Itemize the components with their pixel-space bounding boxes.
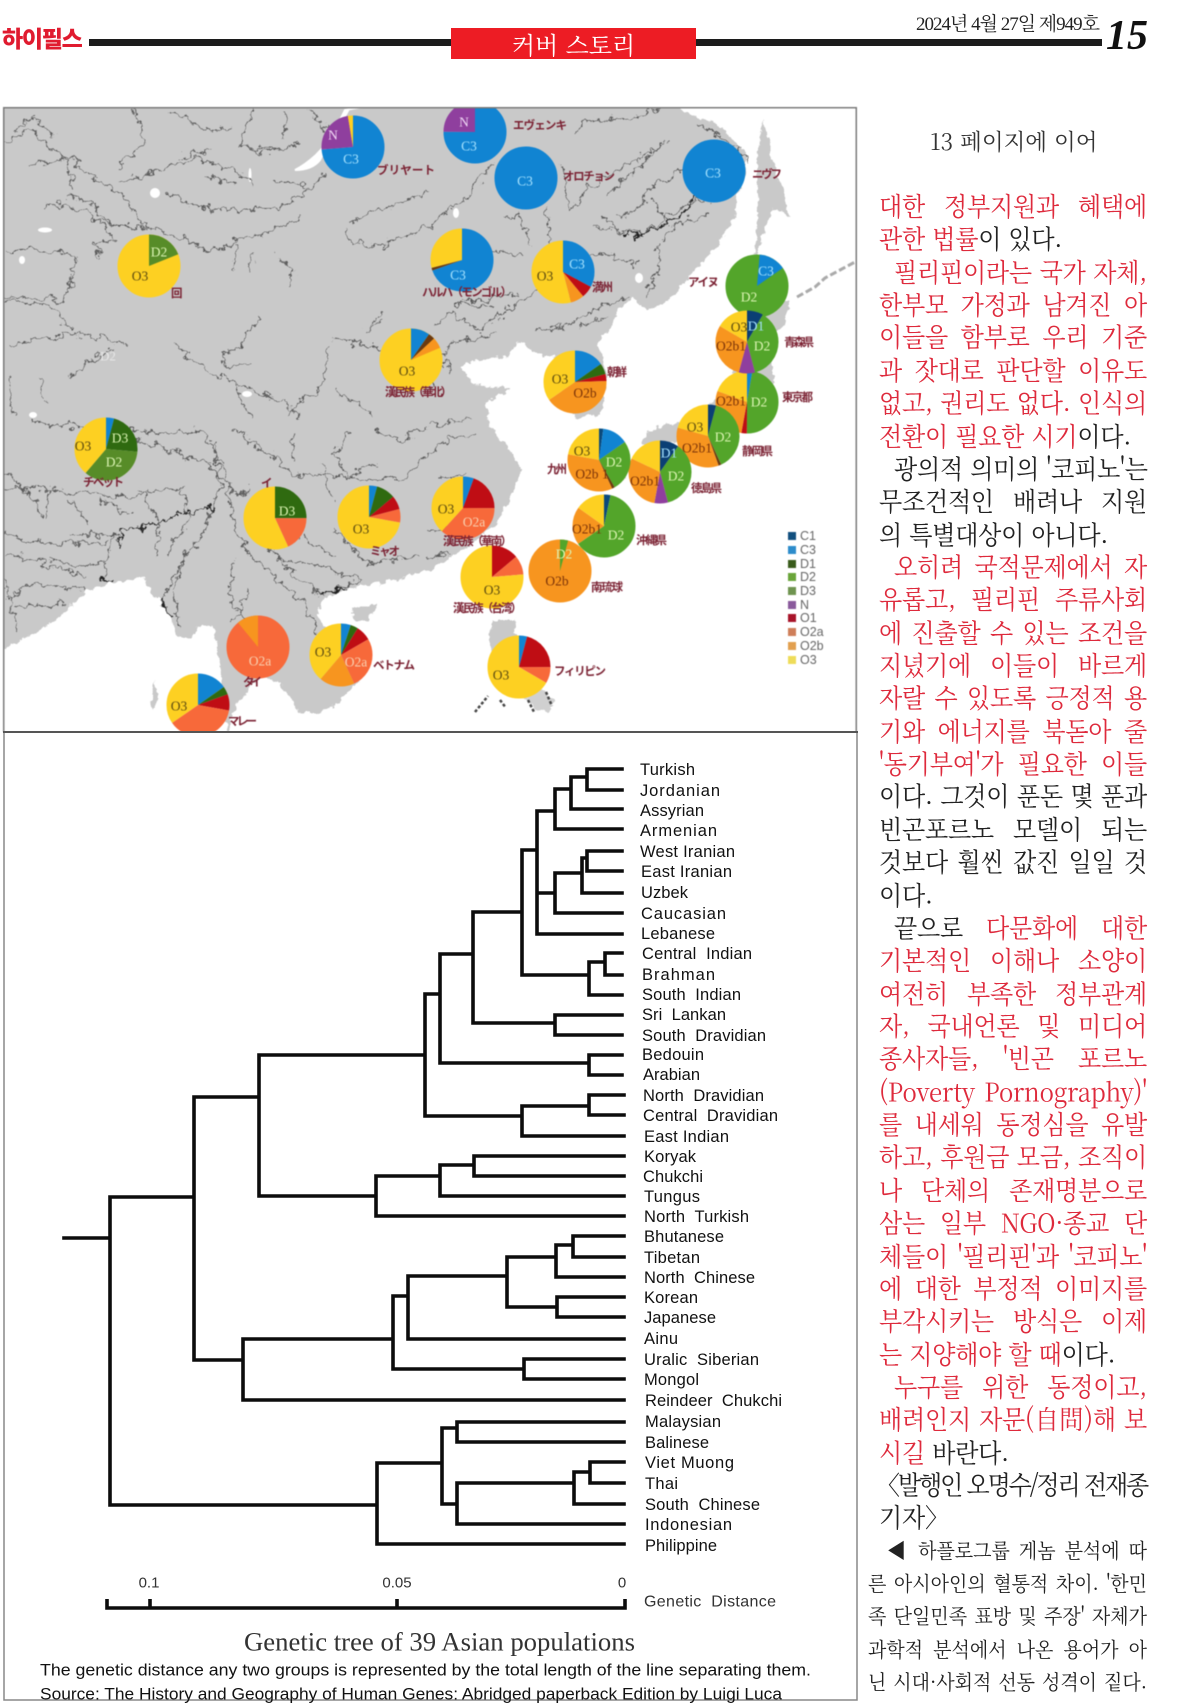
article body column: 한부모 가정과 남겨진 아 xyxy=(879,284,1147,322)
article body column: 종사자들, '빈곤 포르노 xyxy=(879,1038,1147,1076)
article body column: 것보다 훨씬 값진 일일 것 xyxy=(879,842,1147,879)
population labels: Central Indian xyxy=(642,945,752,963)
article body column: 과 잣대로 판단할 이유도 xyxy=(879,350,1147,388)
pie: Evenki xyxy=(459,114,491,154)
map place labels in Japanese: タイ xyxy=(243,676,262,689)
continuation note: 13 페이지에 이어 xyxy=(930,125,1098,157)
map place labels in Japanese: チベット xyxy=(83,476,124,489)
population labels: Mongol xyxy=(644,1371,699,1389)
article body column: 기자〉 xyxy=(879,1497,949,1535)
legend: haplogroups: C3 xyxy=(800,543,816,557)
pie: Han South: O2a xyxy=(463,514,485,530)
map place labels in Japanese: エヴェンキ xyxy=(513,118,567,132)
population labels: North Dravidian xyxy=(643,1087,764,1105)
photo caption: 족 단일민족 표방 및 주장' 자체가 xyxy=(868,1601,1147,1630)
pie: Thai: O2a xyxy=(249,654,271,668)
photo caption: 닌 시대·사회적 선동 성격이 짙다. xyxy=(868,1667,1147,1696)
population labels: Reindeer Chukchi xyxy=(645,1392,782,1410)
legend: haplogroups: O3 xyxy=(800,653,817,667)
genetic distance scale: 0.05 xyxy=(382,1574,412,1592)
legend: haplogroups: O2a xyxy=(800,625,824,639)
genetic distance scale xyxy=(107,1574,776,1610)
map place labels in Japanese: 青森県 xyxy=(784,335,814,349)
article body column: (Poverty Pornography)' xyxy=(879,1071,1147,1109)
population labels: Central Dravidian xyxy=(643,1107,778,1125)
map place labels in Japanese: 南琉球 xyxy=(591,580,624,594)
article body column: 오히려 국적문제에서 자 xyxy=(894,546,1147,584)
pie: Han North: O3 xyxy=(399,364,415,378)
pie: Shizuoka xyxy=(682,420,731,456)
pie: Kyushu: D2 xyxy=(606,454,622,470)
population labels: Balinese xyxy=(645,1434,709,1452)
population labels: Brahman xyxy=(642,966,715,984)
population labels: Lebanese xyxy=(641,925,715,943)
pie: Korea xyxy=(552,366,597,400)
pie: Kyushu xyxy=(574,444,622,482)
population labels: South Chinese xyxy=(645,1496,760,1514)
map place labels in Japanese: アイヌ xyxy=(688,276,719,289)
pie: Aomori xyxy=(716,318,770,358)
population labels: Arabian xyxy=(643,1066,700,1084)
pie: Khalkha Mongol xyxy=(446,244,478,282)
rivers xyxy=(3,107,750,633)
population labels: Assyrian xyxy=(640,802,704,820)
genetic tree panel xyxy=(3,731,858,1704)
map place labels in Japanese: 朝鮮 xyxy=(607,365,628,379)
pie: Han South xyxy=(438,492,485,530)
pie: Manchu: C3 xyxy=(569,256,585,272)
map place labels in Japanese: 漢民族（台湾） xyxy=(453,601,522,615)
map place labels in Japanese: フィリピン xyxy=(554,665,606,678)
article body column: 빈곤포르노 모델이 되는 xyxy=(879,809,1147,847)
article body column: 유롭고, 필리핀 주류사회 xyxy=(879,579,1147,617)
pie: Malay xyxy=(171,689,214,721)
page number: 15 xyxy=(1106,13,1148,59)
pie: Tokushima: O2b1 xyxy=(630,474,660,488)
pie: Tokushima: D1 xyxy=(661,446,677,460)
pie: Vietnam xyxy=(315,639,367,671)
pie: Evenki: C3 xyxy=(461,138,477,154)
pie: Thai xyxy=(242,631,274,668)
pie: Manchu: O3 xyxy=(537,268,553,284)
map panel: haplogroup pies over East Asia xyxy=(2,106,858,732)
pie: Evenki: N xyxy=(459,114,469,130)
population labels: Malaysian xyxy=(645,1413,721,1431)
pie: Buryat xyxy=(328,128,369,166)
legend: haplogroups: D2 xyxy=(800,570,816,584)
article body column: 에 진출할 수 있는 조건을 xyxy=(879,612,1147,650)
map place labels in Japanese xyxy=(83,118,814,728)
article body column: 대한 정부지원과 혜택에 xyxy=(879,186,1147,224)
section name: 하이필스: 하이필스 xyxy=(2,20,81,54)
pie: Tokyo xyxy=(716,386,767,418)
population labels: Chukchi xyxy=(643,1168,703,1186)
chart caption: Source: The History and Geography of Human Genes: Abridged paperback Edition by Luigi Luca xyxy=(40,1684,783,1704)
header: newspaper strip xyxy=(2,13,1148,61)
article body column: 광의적 의미의 '코피노'는 xyxy=(894,448,1148,486)
pie: Ainu xyxy=(741,264,774,304)
article body column: 이들을 함부로 우리 기준 xyxy=(879,317,1147,355)
legend: haplogroups: D3 xyxy=(800,584,816,598)
genetic distance scale: 0 xyxy=(618,1574,626,1592)
map place labels in Japanese: 九州 xyxy=(547,463,567,476)
map place labels in Japanese: ブリヤート xyxy=(377,163,435,177)
pie: Han Taiwan: O3 xyxy=(484,582,500,598)
pie: Tibet: D2 xyxy=(106,454,122,470)
pie: Aomori: O2b1 xyxy=(716,338,746,354)
land masses xyxy=(0,104,790,735)
map place labels in Japanese: 静岡県 xyxy=(742,444,774,458)
pie: Uighur: D2 xyxy=(151,244,167,260)
pie: Kyushu: O3 xyxy=(574,444,590,458)
map place labels in Japanese: 徳島県 xyxy=(691,481,722,495)
dendrogram of 39 populations xyxy=(64,769,624,1544)
pie: Vietnam: O3 xyxy=(315,644,331,660)
population labels: Viet Muong xyxy=(645,1454,734,1472)
pie: Uighur xyxy=(132,244,167,284)
population labels: Philippine xyxy=(645,1537,717,1555)
article body column: 시길 바란다. xyxy=(879,1432,1009,1470)
population labels: South Dravidian xyxy=(642,1027,766,1045)
article body column: 필리핀이라는 국가 자체, xyxy=(894,251,1147,289)
map place labels in Japanese: 漢民族（華北） xyxy=(385,385,452,399)
article body column: 무조건적인 배려나 지원 xyxy=(879,481,1147,519)
pie: Aomori: O3 xyxy=(731,320,747,334)
header rule xyxy=(89,39,1102,46)
article body column: 에 대한 부정적 이미지를 xyxy=(879,1268,1147,1306)
population labels: Tibetan xyxy=(644,1249,700,1267)
pie: Vietnam: O2a xyxy=(345,654,367,670)
article body column: 자랄 수 있도록 긍정적 용 xyxy=(879,678,1147,715)
article body column: 〈발행인 오명수/정리 전재종 xyxy=(876,1464,1147,1502)
population labels: Uzbek xyxy=(641,884,689,902)
map place labels in Japanese: ハルハ（モンゴル） xyxy=(422,285,512,299)
population labels: Turkish xyxy=(640,761,695,779)
legend: haplogroups xyxy=(788,529,824,667)
population labels: Koryak xyxy=(644,1148,697,1166)
population labels: Bhutanese xyxy=(644,1228,724,1246)
pie: Tokyo: D2 xyxy=(751,394,767,410)
population labels: Sri Lankan xyxy=(642,1006,726,1024)
red banner: 커버 스토리: 커버 스토리 xyxy=(512,26,635,61)
legend: haplogroups: D1 xyxy=(800,557,816,571)
population labels: North Turkish xyxy=(644,1208,749,1226)
article body column: 누구를 위한 동정이고, xyxy=(894,1366,1147,1404)
pie: Philippines xyxy=(493,651,535,683)
pie: Buryat: C3 xyxy=(343,152,359,166)
population labels: Ainu xyxy=(644,1330,678,1348)
pie: Uighur: O3 xyxy=(132,268,148,284)
population labels: Caucasian xyxy=(641,905,726,923)
pie: Shizuoka: O2b1 xyxy=(682,440,712,456)
photo caption xyxy=(868,1535,1147,1696)
pie: Philippines: O3 xyxy=(493,668,509,682)
lakes xyxy=(19,107,643,418)
population labels: Korean xyxy=(644,1289,698,1307)
pie: Shizuoka: D2 xyxy=(715,430,731,444)
pie: Tokushima xyxy=(630,446,684,488)
map place labels in Japanese: ニヴフ xyxy=(752,167,782,181)
map place labels in Japanese: 漢民族（華南） xyxy=(443,534,512,548)
article body column xyxy=(876,186,1149,1535)
pie: Miao: O3 xyxy=(353,522,369,536)
legend: haplogroups: N xyxy=(800,598,809,612)
population labels: Thai xyxy=(645,1475,678,1493)
article body column: 지녔기에 이들이 바르게 xyxy=(879,645,1147,683)
pie: Nivkh xyxy=(698,155,730,187)
article body column: 삼는 일부 NGO·종교 단 xyxy=(879,1202,1147,1240)
population labels: Indonesian xyxy=(645,1516,732,1534)
map place labels in Japanese: イ xyxy=(261,477,272,490)
population labels: Bedouin xyxy=(642,1046,704,1064)
pie: Shizuoka: O3 xyxy=(687,420,703,434)
pie: Tokyo: O2b1 xyxy=(716,394,746,408)
legend: haplogroups: O2b xyxy=(800,639,824,653)
article body column: 는 지양해야 할 때이다. xyxy=(879,1333,1115,1371)
pie: Kyushu: O2b 1 xyxy=(575,466,609,482)
population labels: East Indian xyxy=(644,1128,729,1146)
map place labels in Japanese: 回 xyxy=(171,287,182,300)
article body column: 끝으로 다문화에 대한 xyxy=(894,907,1147,945)
legend: haplogroups: O1 xyxy=(800,611,817,625)
article body column: 의 특별대상이 아니다. xyxy=(879,514,1108,551)
map place labels in Japanese: ベトナム xyxy=(373,659,415,672)
article body column: 를 내세워 동정심을 유발 xyxy=(879,1104,1147,1142)
pie: Orochon: C3 xyxy=(517,174,533,188)
article body column: 기와 에너지를 북돋아 줄 xyxy=(879,710,1147,748)
pie: South Ryukyu: D2 xyxy=(556,546,572,562)
faint region label: D2: D2 xyxy=(100,348,116,364)
map place labels in Japanese: ミャオ xyxy=(370,545,400,558)
pie: Yi: D3 xyxy=(279,504,295,518)
article body column: 기본적인 이해나 소양이 xyxy=(879,940,1147,978)
article body column: 배려인지 자문(自問)해 보 xyxy=(879,1399,1147,1437)
legend: haplogroups: C1 xyxy=(800,529,816,543)
article body column: 부각시키는 방식은 이제 xyxy=(879,1301,1147,1338)
article body column: 관한 법률이 있다. xyxy=(879,219,1062,256)
population labels: East Iranian xyxy=(641,863,732,881)
map place labels in Japanese: 満州 xyxy=(592,280,613,294)
article body column: 체들이 '필리핀'과 '코피노' xyxy=(879,1235,1147,1273)
article body column: 이다. 그것이 푼돈 몇 푼과 xyxy=(879,776,1147,814)
article body column: 이다. xyxy=(879,874,933,912)
pie: Buryat: N xyxy=(328,128,338,142)
pie: Ainu: D2 xyxy=(741,290,757,304)
chart title: Genetic tree of 39 Asian populations xyxy=(244,1628,635,1656)
Philippine island specks xyxy=(475,692,552,712)
population labels: Tungus xyxy=(644,1188,700,1206)
pie: Han Taiwan xyxy=(476,561,508,598)
population labels: West Iranian xyxy=(640,843,735,861)
map place labels in Japanese: 東京都 xyxy=(782,390,814,404)
pie: Tibet xyxy=(75,430,128,470)
population labels xyxy=(640,761,782,1555)
article body column: 자, 국내언론 및 미디어 xyxy=(879,1005,1147,1043)
chart caption xyxy=(40,1660,811,1704)
population labels: North Chinese xyxy=(644,1269,755,1287)
population labels: Jordanian xyxy=(640,782,720,800)
pie: Khalkha Mongol: C3 xyxy=(450,268,466,282)
issue date: 2024년 4월 27일 제949호 xyxy=(916,14,1099,35)
chart caption: The genetic distance any two groups is represented by the total length of the line separating them. xyxy=(40,1660,811,1680)
article body column: '동기부여'가 필요한 이들 xyxy=(879,743,1147,781)
pie: Okinawa: D2 xyxy=(608,528,624,542)
pie: Korea: O2b xyxy=(573,386,597,400)
map place labels in Japanese: 沖縄県 xyxy=(636,533,668,547)
pie: Korea: O3 xyxy=(552,372,568,386)
population labels: Japanese xyxy=(644,1309,716,1327)
pie: Nivkh: C3 xyxy=(705,166,721,180)
pie: South Ryukyu: O2b xyxy=(545,574,569,588)
pie: Manchu xyxy=(537,256,585,288)
photo caption: 과학적 분석에서 나온 용어가 아 xyxy=(868,1634,1147,1663)
population labels: Uralic Siberian xyxy=(644,1351,759,1369)
pie: Tibet: D3 xyxy=(112,430,128,446)
pie: Han North xyxy=(395,344,427,378)
pie: Tokushima: D2 xyxy=(668,468,684,484)
pie: Okinawa: O2b1 xyxy=(572,522,602,536)
photo caption: ◀ 하플로그룹 게놈 분석에 따 xyxy=(887,1535,1147,1564)
pie: Aomori: D1 xyxy=(748,318,764,334)
pie: Tibet: O3 xyxy=(75,438,91,454)
map place labels in Japanese: オロチョン xyxy=(563,170,615,183)
article body column: 없고, 권리도 없다. 인식의 xyxy=(879,382,1147,420)
population labels: Armenian xyxy=(640,822,717,840)
red banner: 커버 스토리 xyxy=(451,28,696,59)
pie: Aomori: D2 xyxy=(754,338,770,354)
article body column: 하고, 후원금 모금, 조직이 xyxy=(879,1137,1147,1174)
photo caption: 른 아시아인의 혈통적 차이. '한민 xyxy=(868,1568,1147,1597)
pie: South Ryukyu xyxy=(544,546,576,588)
genetic distance scale: 0.1 xyxy=(139,1574,159,1592)
population labels: South Indian xyxy=(642,986,741,1004)
genetic distance scale: Genetic Distance xyxy=(644,1594,776,1610)
Kuril island chain xyxy=(797,262,855,297)
article body column: 전환이 필요한 시기이다. xyxy=(879,415,1131,453)
pie: Malay: O3 xyxy=(171,698,187,714)
map place labels in Japanese: マレー xyxy=(228,716,257,728)
pie: Han South: O3 xyxy=(438,502,454,516)
pie: Okinawa xyxy=(572,510,624,542)
pie: Ainu: C3 xyxy=(758,264,774,278)
article body column: 여전히 부족한 정부관계 xyxy=(879,973,1147,1010)
pie: Orochon xyxy=(510,162,542,194)
pie: Miao xyxy=(353,501,385,536)
article body column: 나 단체의 존재명분으로 xyxy=(879,1169,1147,1207)
pie: Yi xyxy=(259,502,295,534)
